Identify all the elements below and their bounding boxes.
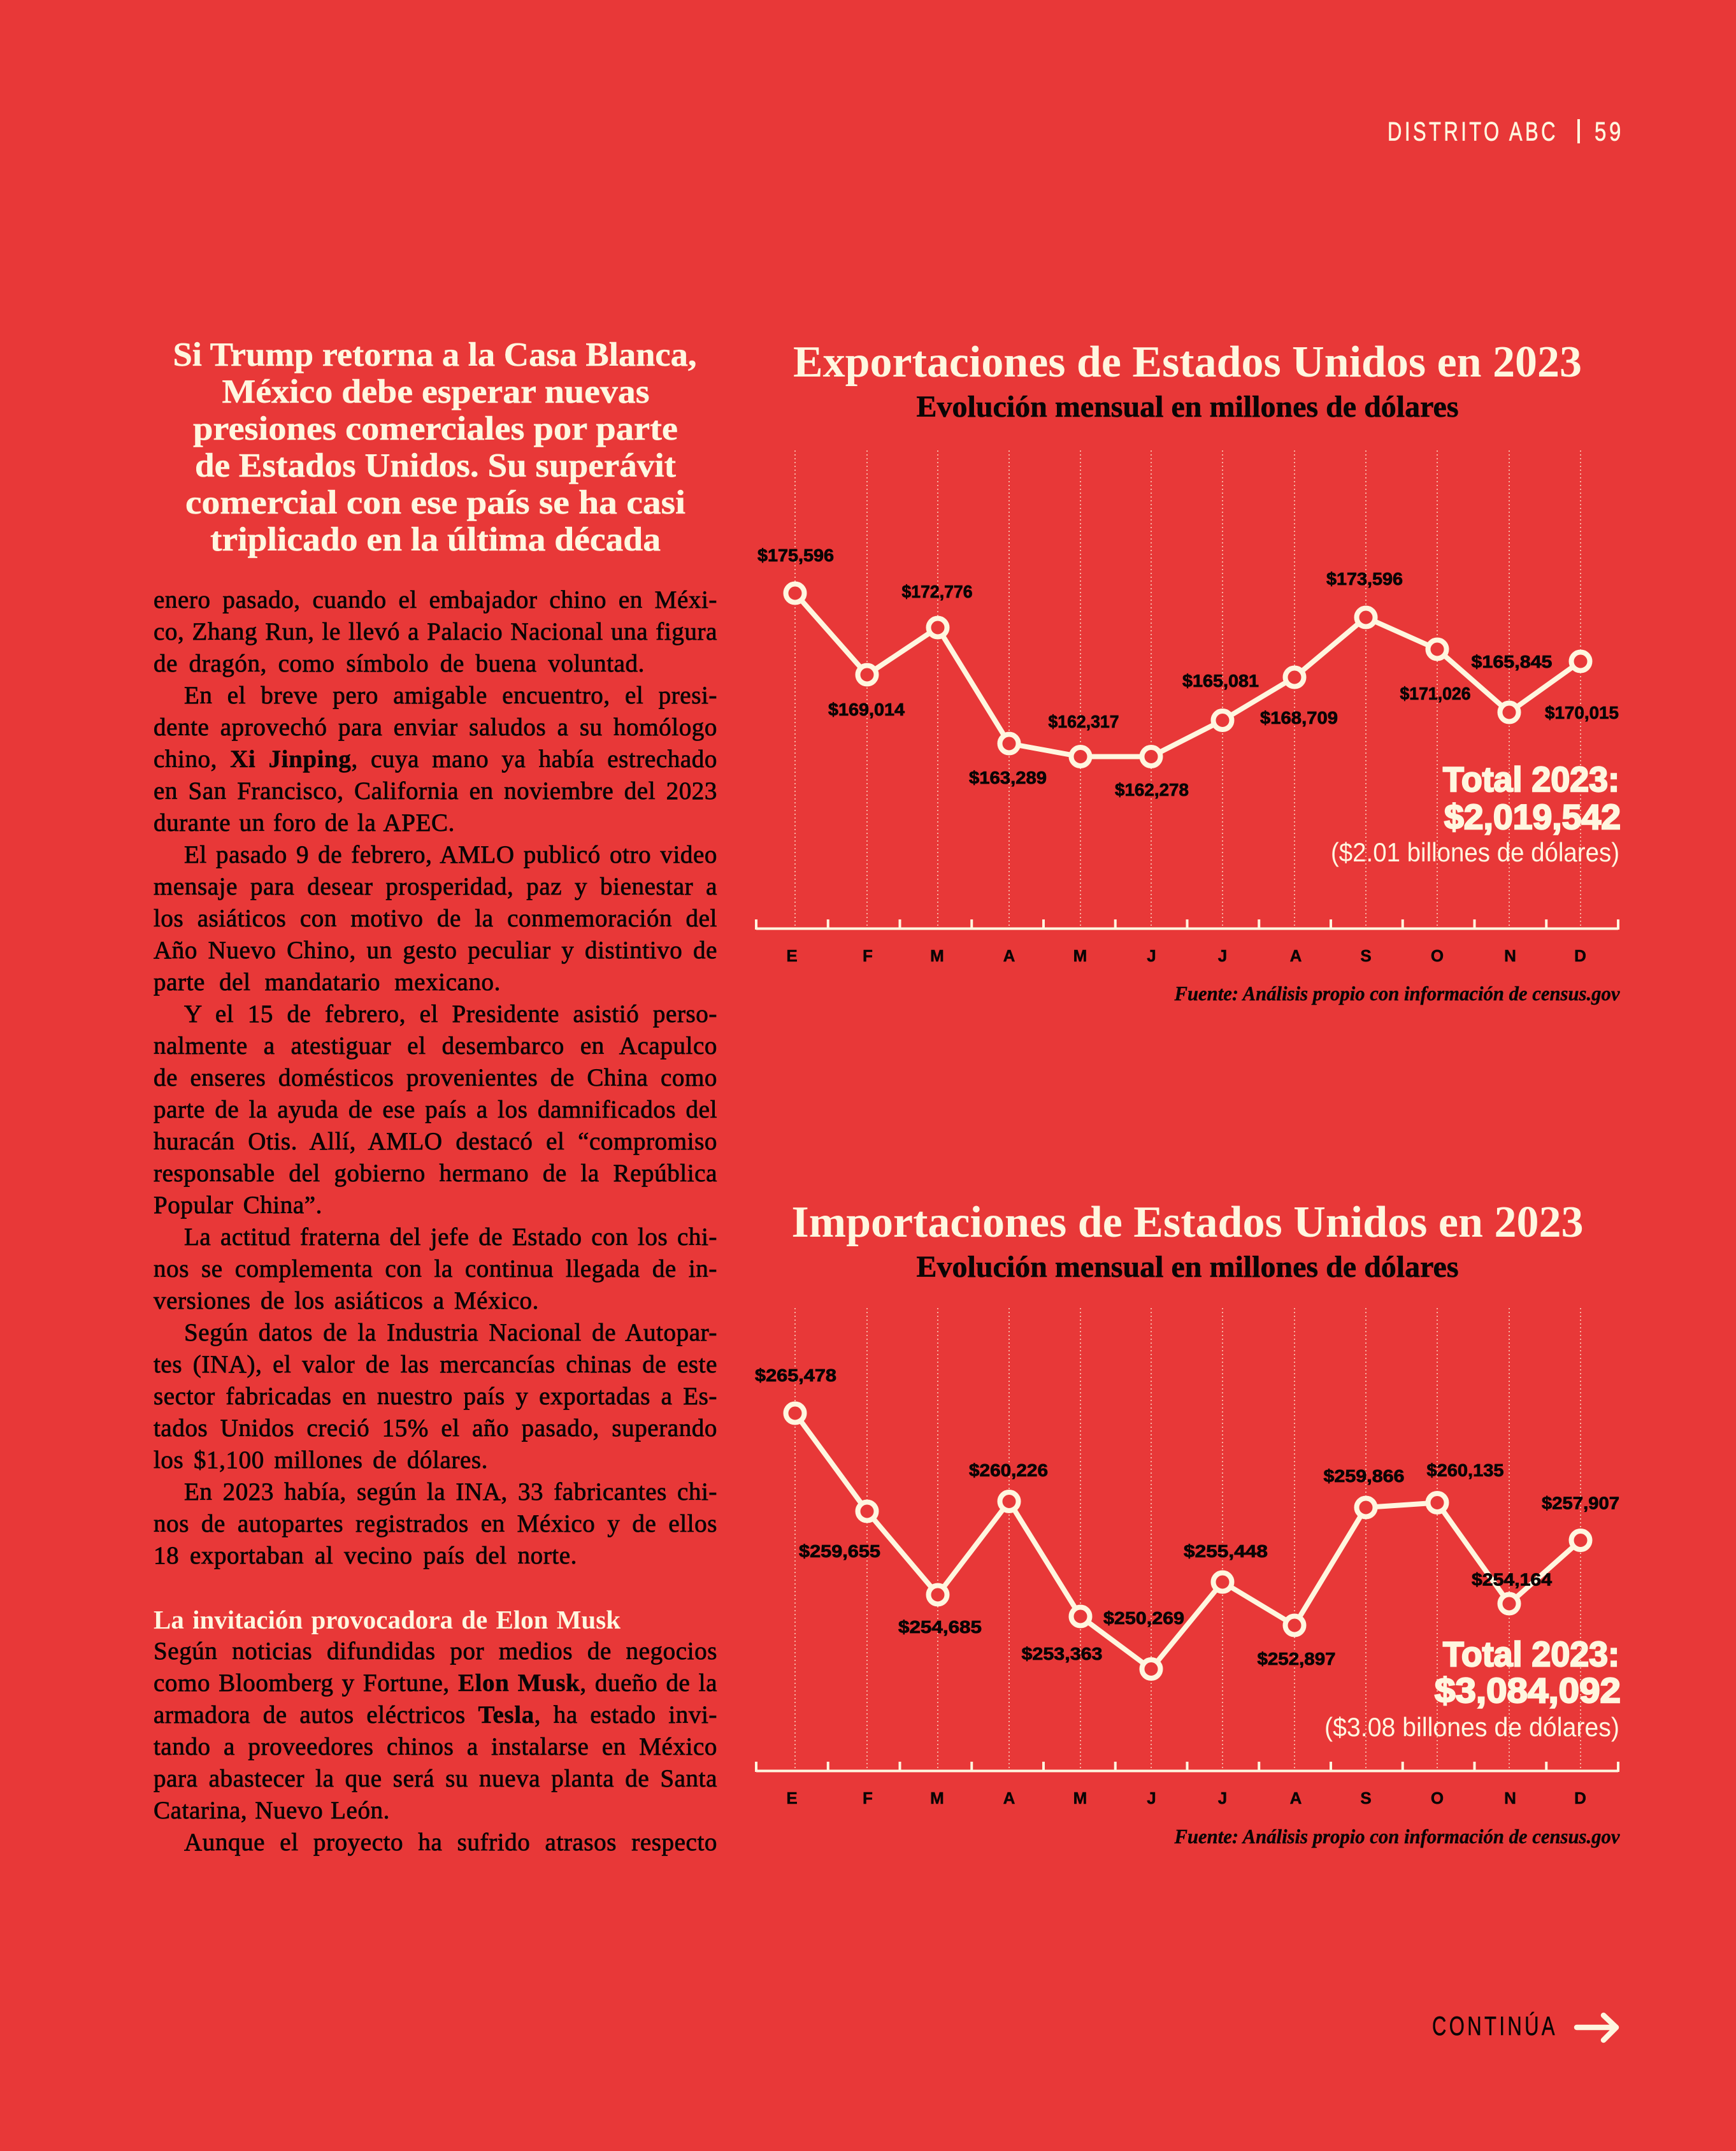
article body text column	[153, 586, 717, 1856]
running header: section and page number: DISTRITO ABC	[1388, 116, 1558, 147]
pull quote heading: comercial con ese país se ha casi	[185, 484, 685, 521]
imports value labels: $259,866	[1324, 1466, 1404, 1486]
paragraph: friendly meeting: en San Francisco, California en noviembre del 2023	[154, 777, 717, 804]
exports line series	[795, 593, 1581, 757]
paragraph: manufacturers: 18 exportaban al vecino país del norte.	[154, 1542, 577, 1569]
exports month labels: S	[1360, 946, 1372, 965]
paragraph: manufacturers: nos de autopartes registrados en México y de ellos	[154, 1510, 717, 1537]
paragraph: Acapulco aid: huracán Otis. Allí, AMLO destacó el “compromiso	[154, 1128, 717, 1155]
exports value labels: $162,317	[1049, 712, 1119, 731]
paragraph: friendly meeting: En el breve pero amigable encuentro, el presi-	[184, 682, 717, 709]
imports total callout: $3,084,092	[1435, 1671, 1621, 1710]
paragraph: auto parts: sector fabricadas en nuestro país y exportadas a Es-	[154, 1383, 717, 1409]
imports value labels	[755, 1365, 1619, 1669]
paragraph: Acapulco aid	[154, 1000, 717, 1219]
exports value labels: $162,278	[1115, 780, 1189, 800]
exports month labels: F	[863, 946, 873, 965]
imports month labels: A	[1003, 1788, 1015, 1808]
imports title: Importaciones de Estados Unidos en 2023	[791, 1198, 1584, 1247]
paragraph: Musk invitation: armadora de autos eléctricos Tesla, ha estado invi-	[154, 1701, 717, 1728]
paragraph: new year video: parte del mandatario mexicano.	[154, 968, 501, 995]
imports month labels: A	[1290, 1788, 1302, 1808]
paragraph: Acapulco aid: de enseres domésticos provenientes de China como	[154, 1064, 717, 1091]
imports month labels: J	[1147, 1788, 1156, 1808]
imports month labels: J	[1218, 1788, 1227, 1808]
exports source note: Fuente: Análisis propio con información de census.gov	[1174, 982, 1620, 1005]
paragraph: Musk invitation: como Bloomberg y Fortune, Elon Musk, dueño de la	[154, 1669, 717, 1696]
pull quote heading: México debe esperar nuevas	[222, 373, 650, 410]
paragraph: friendly meeting: chino, Xi Jinping, cuya mano ya había estrechado	[154, 745, 717, 772]
paragraph: auto parts: los $1,100 millones de dólares.	[154, 1446, 488, 1473]
paragraph: Acapulco aid: Popular China”.	[154, 1191, 322, 1218]
exports month labels	[786, 946, 1586, 965]
paragraph: manufacturers: En 2023 había, según la INA, 33 fabricantes chi-	[184, 1478, 717, 1505]
running header: section and page number: 59	[1595, 116, 1624, 147]
imports month labels: N	[1504, 1788, 1516, 1808]
paragraph: Musk invitation: tando a proveedores chinos a instalarse en México	[154, 1733, 717, 1760]
paragraph: auto parts	[154, 1319, 717, 1473]
imports subtitle: Evolución mensual en millones de dólares	[916, 1250, 1459, 1284]
imports total callout	[1324, 1634, 1621, 1742]
exports month labels: J	[1218, 946, 1227, 965]
panel: imports chart	[755, 1198, 1621, 1848]
exports value labels: $165,081	[1182, 671, 1259, 691]
exports axis	[756, 919, 1618, 930]
paragraph: investment: nos se complementa con la continua llegada de in-	[154, 1255, 717, 1282]
imports value labels: $259,655	[799, 1541, 880, 1561]
paragraph: Acapulco aid: responsable del gobierno hermano de la República	[154, 1160, 717, 1186]
paragraph: auto parts: tados Unidos creció 15% el año pasado, superando	[154, 1414, 717, 1441]
imports value labels: $255,448	[1184, 1541, 1268, 1561]
paragraph: investment: versiones de los asiáticos a México.	[154, 1287, 539, 1314]
imports line series	[795, 1413, 1581, 1669]
paragraph: manufacturers	[154, 1478, 717, 1569]
imports value labels: $265,478	[755, 1365, 836, 1385]
paragraph: investment: La actitud fraterna del jefe de Estado con los chi-	[184, 1223, 717, 1250]
paragraph: Acapulco aid: nalmente a atestiguar el desembarco en Acapulco	[154, 1032, 717, 1059]
pull quote heading: triplicado en la última década	[210, 521, 661, 558]
exports total callout: ($2.01 billones de dólares)	[1331, 837, 1619, 867]
imports month labels: O	[1431, 1788, 1444, 1808]
pull quote heading: Si Trump retorna a la Casa Blanca,	[173, 336, 697, 373]
exports subtitle: Evolución mensual en millones de dólares	[916, 390, 1459, 424]
imports month labels: E	[786, 1788, 798, 1808]
paragraph: new year video: El pasado 9 de febrero, AMLO publicó otro video	[184, 841, 717, 868]
imports data points	[786, 1404, 1590, 1678]
imports total callout: Total 2023:	[1443, 1634, 1619, 1674]
imports value labels: $252,897	[1258, 1649, 1335, 1669]
paragraph: friendly meeting: durante un foro de la APEC.	[154, 809, 455, 836]
paragraph: new year video	[154, 841, 717, 996]
exports month labels: M	[930, 946, 944, 965]
imports value labels: $254,164	[1472, 1570, 1552, 1589]
exports value labels: $165,845	[1472, 652, 1552, 672]
paragraph: friendly meeting	[154, 682, 717, 836]
continue label with arrow: CONTINÚA	[1432, 2011, 1558, 2041]
exports data points	[786, 584, 1590, 766]
paragraph: closing line: Aunque el proyecto ha sufrido atrasos respecto	[184, 1829, 717, 1855]
exports month labels: A	[1290, 946, 1302, 965]
paragraph: Musk invitation: para abastecer la que será su nueva planta de Santa	[154, 1765, 717, 1792]
paragraph: new year video: los asiáticos con motivo de la conmemoración del	[154, 905, 717, 932]
paragraph: friendly meeting: dente aprovechó para enviar saludos a su homólogo	[154, 714, 717, 740]
paragraph: auto parts: Según datos de la Industria Nacional de Autopar-	[184, 1319, 717, 1346]
imports value labels: $254,685	[898, 1617, 982, 1637]
exports month labels: N	[1504, 946, 1516, 965]
pull quote heading	[173, 336, 697, 558]
exports value labels: $163,289	[969, 768, 1047, 788]
exports value labels	[757, 545, 1619, 800]
exports month labels: J	[1147, 946, 1156, 965]
paragraph: new year video: mensaje para desear prosperidad, paz y bienestar a	[154, 873, 717, 900]
exports total callout	[1331, 759, 1621, 867]
imports value labels: $250,269	[1103, 1608, 1184, 1628]
imports value labels: $253,363	[1022, 1644, 1102, 1664]
imports month labels: D	[1574, 1788, 1586, 1808]
exports value labels: $171,026	[1400, 684, 1470, 703]
exports month labels: M	[1073, 946, 1087, 965]
paragraph: Musk invitation: Según noticias difundidas por medios de negocios	[154, 1637, 717, 1664]
paragraph: Musk invitation: Catarina, Nuevo León.	[154, 1797, 390, 1824]
imports month labels: M	[1073, 1788, 1087, 1808]
pull quote heading: presiones comerciales por parte	[193, 410, 678, 447]
exports value labels: $173,596	[1326, 569, 1403, 589]
paragraph: Acapulco aid: parte de la ayuda de ese país a los damnificados del	[154, 1096, 717, 1123]
paragraph: investment	[153, 1223, 717, 1314]
imports month labels: S	[1360, 1788, 1372, 1808]
paragraph: new year video: Año Nuevo Chino, un gesto peculiar y distintivo de	[154, 937, 717, 963]
imports value labels: $257,907	[1542, 1493, 1619, 1513]
exports month guide lines	[795, 450, 1581, 928]
imports value labels: $260,226	[969, 1460, 1048, 1480]
exports value labels: $170,015	[1545, 703, 1619, 723]
imports value labels: $260,135	[1427, 1460, 1503, 1480]
paragraph: auto parts: tes (INA), el valor de las mercancías chinas de este	[154, 1351, 717, 1378]
exports total callout: $2,019,542	[1444, 797, 1621, 837]
imports total callout: ($3.08 billones de dólares)	[1324, 1712, 1619, 1742]
imports month labels: F	[863, 1788, 873, 1808]
paragraph: dragon gift: co, Zhang Run, le llevó a Palacio Nacional una figura	[154, 618, 717, 645]
paragraph: Musk invitation	[154, 1637, 717, 1824]
exports month labels: A	[1003, 946, 1015, 965]
imports month guide lines	[795, 1308, 1581, 1771]
imports source note: Fuente: Análisis propio con información de census.gov	[1174, 1825, 1620, 1848]
exports month labels: E	[786, 946, 798, 965]
imports month labels	[786, 1788, 1586, 1808]
paragraph: Acapulco aid: Y el 15 de febrero, el Presidente asistió perso-	[184, 1000, 717, 1027]
exports value labels: $175,596	[757, 545, 834, 565]
pull quote heading: de Estados Unidos. Su superávit	[195, 447, 676, 484]
imports axis	[756, 1762, 1618, 1772]
exports title: Exportaciones de Estados Unidos en 2023	[793, 338, 1582, 387]
paragraph: dragon gift: de dragón, como símbolo de buena voluntad.	[154, 650, 645, 677]
paragraph: dragon gift: enero pasado, cuando el embajador chino en Méxi-	[154, 586, 717, 613]
exports value labels: $169,014	[828, 700, 905, 719]
exports month labels: O	[1431, 946, 1444, 965]
paragraph: dragon gift	[154, 586, 717, 677]
imports month labels: M	[930, 1788, 944, 1808]
subheading: Elon Musk: La invitación provocadora de Elon Musk	[154, 1604, 621, 1634]
exports month labels: D	[1574, 946, 1586, 965]
exports total callout: Total 2023:	[1443, 759, 1619, 799]
panel: exports chart	[756, 338, 1621, 1005]
exports value labels: $172,776	[902, 582, 972, 601]
exports value labels: $168,709	[1260, 708, 1338, 728]
